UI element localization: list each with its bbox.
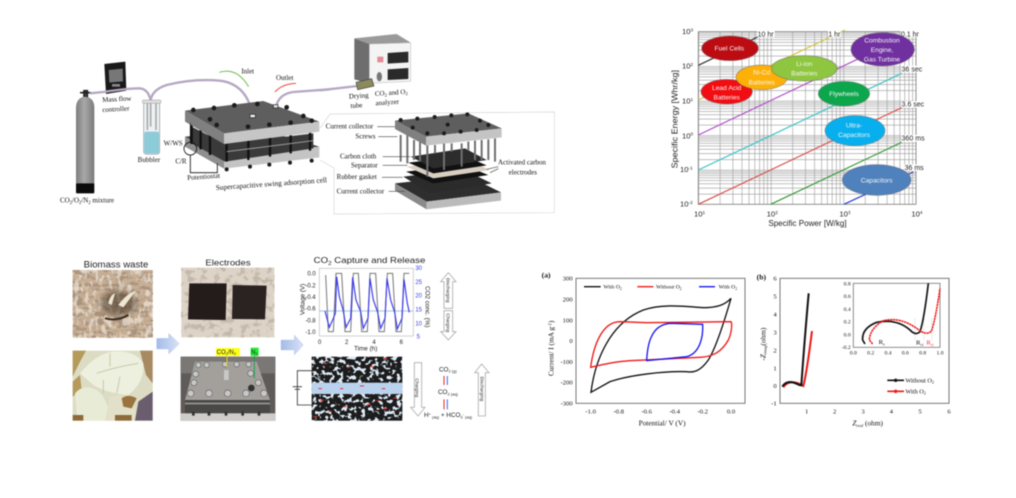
panel: biomass to electrodes photos [73,257,275,421]
y ticks [771,276,777,408]
photo: assembled device [181,357,275,421]
axis ticks: 10 [767,210,775,219]
exploded cell labels: Carbon cloth [340,153,377,161]
inset chart: 0.2 [867,351,874,357]
heading: capture and release: 2 [328,261,332,267]
axis titles: Z [852,419,856,428]
time labels: 36 ms [905,165,924,172]
setup labels: Inlet [241,67,254,75]
time labels: 360 ms [902,136,925,143]
inset chart: 1.0 [936,351,944,357]
icon: mass flow controller [104,62,126,94]
x ticks: 6 [947,409,951,416]
black CV curve [591,298,731,392]
panel: Ragone chart [669,27,925,228]
axis ticks: 0 [691,132,694,137]
axis titles: Voltage (V) [300,284,307,315]
axis ticks: 2 [691,62,694,67]
chart ticks: -0.2 [305,283,316,289]
axis titles: imag [763,345,768,354]
inset chart: 0.0 [844,332,851,338]
axis ticks: 10 [682,62,691,71]
time labels: 10 hr [758,32,774,39]
ellipse labels: Combustion [864,37,900,44]
photo: pale biomass petals [73,351,153,421]
right axis ticks [415,266,423,341]
legend [887,377,934,396]
reaction scheme: + HCO [439,412,460,419]
x ticks: -0.8 [613,409,625,416]
chart ticks: 0 [318,340,322,346]
icon: gas cylinder [76,91,94,193]
arrow: biomass to electrodes [157,333,179,354]
time labels: 1 hr [828,31,841,38]
time labels: 3.6 sec [902,102,925,109]
panel: CO2 capture and release [281,255,489,421]
y ticks: -100 [560,359,573,366]
axis ticks: 10 [682,97,691,106]
legend: 2 [680,287,682,291]
setup labels: /O [72,197,79,205]
setup labels: controller [102,105,130,114]
panel: gas flow setup and adsorption cell [60,62,330,206]
legend: With O [719,285,735,291]
y ticks: 2 [773,347,777,354]
axis titles: ) [546,320,555,323]
axis titles [758,327,884,428]
inset chart [842,281,944,357]
right axis ticks: 15 [415,307,423,313]
icon: potentiostat wiring [184,123,217,173]
arrow: discharging [475,364,489,416]
heading: capture and release: CO [314,255,327,265]
blue CV curve [647,323,703,361]
ellipse labels: Capacitors [838,132,871,139]
x ticks: 0.0 [727,409,736,416]
panel: analyzer and exploded cell [320,34,554,214]
setup labels: Potentiostat [187,172,220,182]
icon: CO2 and O2 analyzer [354,34,411,90]
photo: biomass fibres [73,270,153,338]
reaction scheme: 2 (aq) [447,391,459,396]
axis titles [546,320,686,427]
axis ticks: 10 [682,27,691,36]
ellipse labels: Batteries [749,79,775,86]
axis ticks: 4 [920,210,923,215]
y ticks: -1 [771,401,777,408]
device port labels: /N [228,350,234,356]
time labels: 36 sec [902,66,923,73]
legend: 2 [924,391,926,396]
axis ticks: 10 [839,210,848,219]
axis ticks: -2 [689,200,693,205]
black impedance curve [782,293,809,387]
inset chart: 0.4 [844,307,851,313]
x ticks: -0.2 [697,409,708,416]
setup labels: W/WS [164,139,183,147]
legend: 2 [735,287,737,291]
chart frame [576,278,745,403]
x ticks [585,409,736,416]
time labels: 0.1 hr [901,31,920,38]
chart ticks: 4 [372,340,376,346]
exploded cell labels: Activated carbon [498,159,546,167]
legend: Without O [656,285,680,291]
arrow: charging: Charging [415,378,420,398]
ellipse labels: Ni-Cd [753,69,770,76]
analyzer labels: 2 [385,93,388,99]
axis ticks: 3 [691,27,694,32]
ellipse labels: Lead Acid [712,85,742,92]
reaction scheme: (aq) [431,414,440,419]
chart ticks: 0.0 [307,272,316,278]
ellipse labels: Engine, [871,47,893,54]
inset chart: ct [931,342,935,347]
chart ticks: 2 [345,340,349,346]
analyzer labels: Drying [349,91,369,101]
axis titles: (ohm) [863,419,884,428]
reaction scheme: H [424,412,429,419]
diagram: porous electrodes [293,357,402,421]
callout frame [320,112,554,214]
exploded cell labels [326,123,546,195]
arrow: discharging: Discharging [479,377,484,402]
x ticks [805,409,951,416]
ellipse labels: Batteries [714,94,740,101]
inset chart: 0.0 [850,351,857,357]
axis ticks: 1 [691,97,694,102]
axis ticks: 3 [848,210,851,215]
axis ticks: 10 [911,210,920,219]
inset chart: R [916,340,920,347]
legend: With O [603,285,620,291]
y ticks: 1 [773,365,777,372]
chart ticks: -0.4 [305,295,316,301]
constant time lines [698,30,913,204]
gas tubing [90,80,330,115]
exploded cell labels: Rubber gasket [337,173,377,181]
exploded cell labels: Current collector [326,123,374,131]
setup labels: Bubbler [138,156,161,164]
axis ticks [680,27,923,219]
legend: 2 [620,287,622,291]
device port labels: CO [217,350,226,356]
y ticks: 5 [773,293,777,300]
legend: Without O [905,377,932,384]
device port labels: 2 [234,351,237,356]
arrows: charge and discharge on chart: Discharging [445,278,450,303]
inset chart: R [879,339,883,346]
legend: 2 [932,380,934,385]
chart: voltage and CO2 concentration [319,268,413,336]
setup labels: mixture [91,197,114,205]
analyzer labels: analyzer [375,98,400,107]
arrow: outlet [275,83,296,92]
technology ellipses [701,33,914,195]
analyzer labels: tube [350,101,363,110]
axis titles: real [856,423,864,428]
panel label b: (b) [757,272,766,281]
inset chart: R [926,340,931,347]
heading: electrodes: Electrodes [205,257,251,267]
ellipse labels: Flywheels [829,91,859,98]
x ticks: -1.0 [585,409,597,416]
legend [584,285,737,291]
setup labels: 2 [88,201,91,206]
setup labels: C/R [175,157,187,165]
y ticks [560,276,573,407]
inset chart: s [883,341,885,346]
x ticks: -0.6 [641,409,653,416]
x ticks: 3 [861,409,865,416]
ellipse labels [712,37,900,184]
inset chart: 0.6 [844,294,851,300]
exploded cell leader lines [377,127,498,191]
y ticks: -300 [560,400,573,407]
exploded cell labels: electrodes [509,169,537,177]
setup labels: 2 [79,201,82,206]
setup labels: 2 [70,201,73,206]
y ticks: 300 [563,276,573,283]
chart ticks: -0.6 [305,307,316,313]
axis titles: CO2 conc. (%) [423,286,430,327]
y ticks: -200 [560,380,573,387]
inset chart: 0.8 [844,281,851,287]
ellipse labels: Batteries [791,70,818,77]
axis ticks: 10 [682,131,691,140]
axis titles: Specific Power [W/kg] [768,218,847,228]
right axis ticks: 20 [415,294,423,300]
device port labels: 2 [226,351,229,356]
ellipse labels: Capacitors [861,177,893,184]
axis titles [669,70,847,228]
axis titles: (ohm) [758,327,767,345]
setup labels: CO [60,197,70,205]
x ticks: 1 [805,409,808,416]
reaction scheme: 3 [460,414,463,419]
arrow: photos to chart [281,335,303,355]
chart ticks [305,272,404,346]
reaction scheme: + [429,411,432,416]
reaction scheme: - [463,412,465,417]
axis titles: Current/ I (mA g [546,327,555,376]
outlet tube to analyzer [320,86,357,90]
right axis ticks: 25 [415,280,423,286]
exploded cell labels: Separator [351,161,378,169]
axis ticks: 1 [703,210,706,215]
device port labels [216,348,259,378]
icon: exploded cell stack [395,112,502,209]
analyzer labels [349,88,409,110]
analyzer labels: CO [375,89,385,98]
y ticks: 4 [773,311,777,318]
analyzer labels: and O [387,88,406,97]
setup labels: /N [81,197,88,205]
arrows: charge and discharge on chart: Charging [445,313,450,333]
setup labels: Supercapacitive swing adsorption cell [216,175,327,192]
inset chart: 0.2 [844,320,851,326]
exploded cell labels: Screws [355,133,376,141]
axis titles: Time (h) [354,345,377,352]
reaction scheme: (aq) [464,415,473,420]
y ticks: 200 [563,297,573,304]
y ticks: 0 [569,338,573,345]
panel label a: (a) [542,270,551,279]
axis titles: Potential/ V (V) [639,418,686,427]
axis titles: Specific Energy [Whr/kg] [669,70,679,168]
x ticks: 2 [833,409,836,416]
x ticks: 4 [890,409,894,416]
ellipse labels: Li-ion [796,61,813,68]
chart ticks: -0.8 [305,318,316,324]
inset chart: 0.8 [919,351,926,357]
arrow: inlet [219,71,249,87]
axis ticks: 10 [694,210,703,219]
reaction scheme: 2 (g) [448,369,457,374]
y ticks: 100 [563,317,573,324]
arrow: charging [411,363,425,416]
chart ticks: 6 [400,340,404,346]
setup labels: Mass flow [102,94,133,104]
axis titles: -Z [758,354,767,361]
y ticks: 0 [773,383,777,390]
reaction scheme: CO [438,389,447,396]
setup labels: Outlet [276,74,294,82]
analyzer labels: 2 [405,92,409,97]
time labels [757,31,925,172]
legend: With O [905,388,924,395]
ellipse labels: Fuel Cells [715,45,745,52]
icon: bubbler [142,100,161,154]
right axis ticks: 30 [415,266,423,272]
x ticks: 5 [918,409,922,416]
axis titles: -1 [548,322,553,327]
axis ticks: -1 [689,165,693,170]
right axis ticks: 5 [417,335,421,341]
axis ticks: 10 [680,200,689,209]
chart ticks: -1.0 [305,330,316,336]
inset chart: 0.6 [902,351,909,357]
ellipse labels: Gas Turbine [864,56,900,63]
axis ticks: 10 [680,165,689,174]
heading: capture and release: Capture and Release [332,255,426,265]
ellipse labels: Ultra- [846,123,862,130]
reaction scheme: CO [439,366,448,373]
arrows: charge and discharge on chart [441,273,456,340]
inset chart: 0.4 [884,351,892,357]
red CV curve [591,322,732,367]
heading: biomass waste: Biomass waste [84,259,148,269]
axis titles [300,284,430,352]
inset chart: -0.2 [842,345,851,351]
device port labels: 2 [255,351,258,356]
inset chart: ct [920,342,924,347]
exploded cell labels: Current collector [337,187,385,195]
setup labels [60,67,327,206]
chart frame [780,278,949,403]
photo: carbon cloth electrodes [181,268,274,337]
right axis ticks: 10 [415,321,423,327]
y ticks: 3 [773,329,777,336]
red impedance curve [783,331,812,387]
panel: (a) cyclic voltammetry [542,270,745,427]
reaction scheme [424,366,473,420]
icon: assembled adsorption cell [185,101,319,171]
axis ticks: 2 [775,210,778,215]
y ticks: 6 [773,276,777,283]
device port labels: N [251,350,255,356]
panel: (b) Nyquist plot [757,272,951,428]
x ticks: -0.4 [669,409,681,416]
chart grid [698,32,916,204]
